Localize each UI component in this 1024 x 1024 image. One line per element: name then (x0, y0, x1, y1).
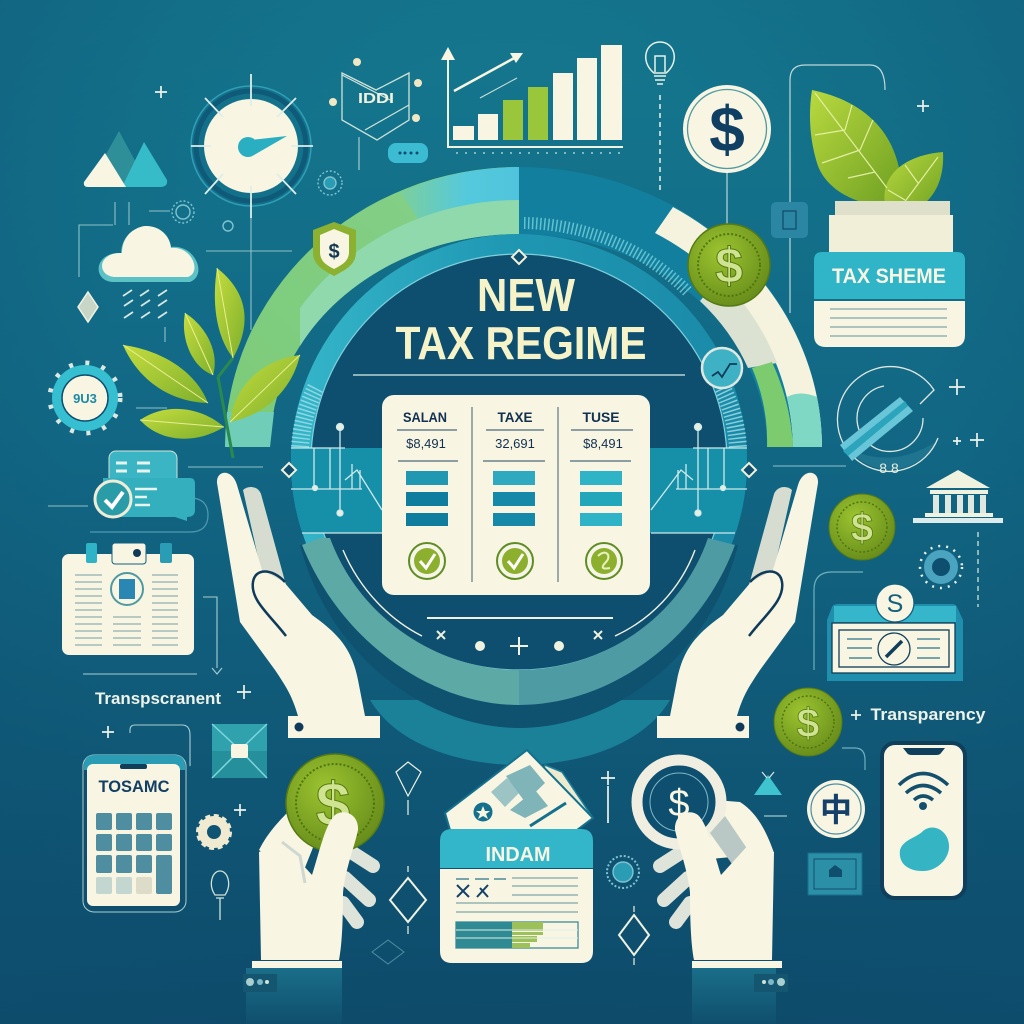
column bars (406, 471, 622, 526)
panel: indam card (440, 750, 593, 963)
icon: hexagon badge (329, 58, 422, 170)
right grey layer (700, 277, 777, 368)
icon: currency coin: 中 (820, 792, 852, 828)
icon: chat bubbles with check (90, 451, 208, 532)
icon: small diamond (78, 292, 98, 322)
icon: large leaves (810, 90, 943, 216)
icon: coin ring and right bottom hand: $ (668, 783, 690, 825)
icon: chip (808, 853, 862, 895)
panel: indam card: INDAM (486, 844, 550, 866)
central ring gauge (225, 167, 822, 728)
icon: small tag (771, 202, 808, 238)
panel: check card (827, 584, 963, 681)
gauge diamonds (282, 250, 756, 477)
connector line (790, 65, 885, 313)
comparison table panel (382, 395, 650, 595)
connector line (130, 725, 190, 766)
decorative diamonds (372, 762, 649, 965)
icon: mountains (84, 131, 167, 187)
chart band (291, 448, 747, 533)
icon: left hand (217, 473, 380, 738)
title: NEW (477, 269, 576, 321)
label: transparent: Transpscranent (95, 689, 221, 708)
green coin lower right (774, 688, 842, 756)
column values: $8,491 (406, 436, 446, 451)
inner dark disc (311, 254, 727, 670)
icon: gear with badge: 9U3 (73, 391, 97, 406)
hatch top right (524, 223, 688, 292)
icon: currency coin (807, 780, 865, 838)
bottom left arc (302, 538, 519, 705)
inner ring (291, 234, 747, 690)
icon: right hand (657, 473, 818, 738)
column headers: TAXE (498, 409, 532, 425)
icon: coin and left bottom hand: $ (316, 771, 350, 840)
icon: coin ring and right bottom hand (637, 760, 788, 1024)
green coin right (829, 494, 895, 560)
column headers (403, 409, 620, 425)
left arc foot (225, 412, 274, 447)
right aqua foot (787, 394, 822, 447)
right mini chart (651, 424, 747, 533)
green coin on ring: $ (715, 238, 743, 294)
green coin on ring (688, 224, 770, 306)
panel: calculator device: TOSAMC (98, 777, 170, 796)
connector line (814, 572, 863, 670)
label: transparency: Transparency (870, 705, 986, 724)
column headers: SALAN (403, 409, 447, 425)
hatch left (300, 388, 316, 447)
icon: chat dots (388, 143, 428, 163)
icon: dollar coin (683, 85, 771, 225)
status badges (409, 543, 622, 579)
right blue arc (519, 167, 822, 447)
small symbols below table (343, 550, 695, 655)
icon: dollar coin: $ (709, 93, 745, 165)
title (396, 269, 646, 369)
icon: hexagon badge: IDDI (358, 90, 394, 107)
panel: calculator device (83, 755, 186, 912)
icon: ring badge (702, 348, 742, 388)
icon: pencil dial (837, 367, 938, 476)
icon: gear right (920, 532, 978, 607)
column headers: TUSE (582, 409, 620, 425)
panel: tax scheme card: TAX SHEME (832, 265, 946, 288)
top cyan segment (400, 167, 519, 222)
connector line (842, 748, 865, 770)
column values: 32,691 (495, 436, 535, 451)
icon: shield: $ (328, 241, 340, 263)
icon: bank (913, 470, 1003, 523)
icon: gear with badge (50, 363, 120, 433)
icon: pencil dial: 8 8 (879, 460, 899, 476)
title: TAX REGIME (396, 317, 646, 369)
lower teal lobe behind ring (370, 700, 670, 765)
green coin lower right: $ (797, 700, 820, 746)
decorative dials (172, 171, 639, 888)
thin guide lines (48, 137, 846, 816)
panel: tax scheme card (814, 201, 965, 347)
left green arc (225, 167, 519, 447)
decorative sparkles (102, 86, 984, 823)
bottom right arc (519, 538, 735, 705)
right green layer (752, 362, 793, 447)
icon: light bulb (646, 42, 674, 192)
icon: triangle (754, 772, 787, 816)
icon: plant left (123, 268, 300, 458)
column values: $8,491 (583, 436, 623, 451)
connector lines (83, 597, 222, 674)
dark under-band (300, 545, 738, 728)
icon: small bulb (211, 871, 229, 920)
bar chart (441, 45, 623, 153)
icon: small gear (198, 816, 230, 848)
icon: cloud (99, 226, 198, 318)
green coin right: $ (851, 506, 873, 550)
light green inner layer (300, 200, 519, 346)
icon: clock gauge (191, 74, 313, 218)
icon: envelope (212, 724, 267, 778)
icon: coin and left bottom hand (243, 754, 384, 1024)
panel: calendar (62, 543, 194, 655)
right cream layer (655, 207, 822, 447)
column values (406, 436, 623, 451)
left mini chart (291, 424, 382, 533)
icon: shield (313, 222, 356, 276)
panel: check card: S (887, 590, 903, 618)
icon: phone (882, 743, 965, 898)
hatch right (722, 388, 738, 447)
